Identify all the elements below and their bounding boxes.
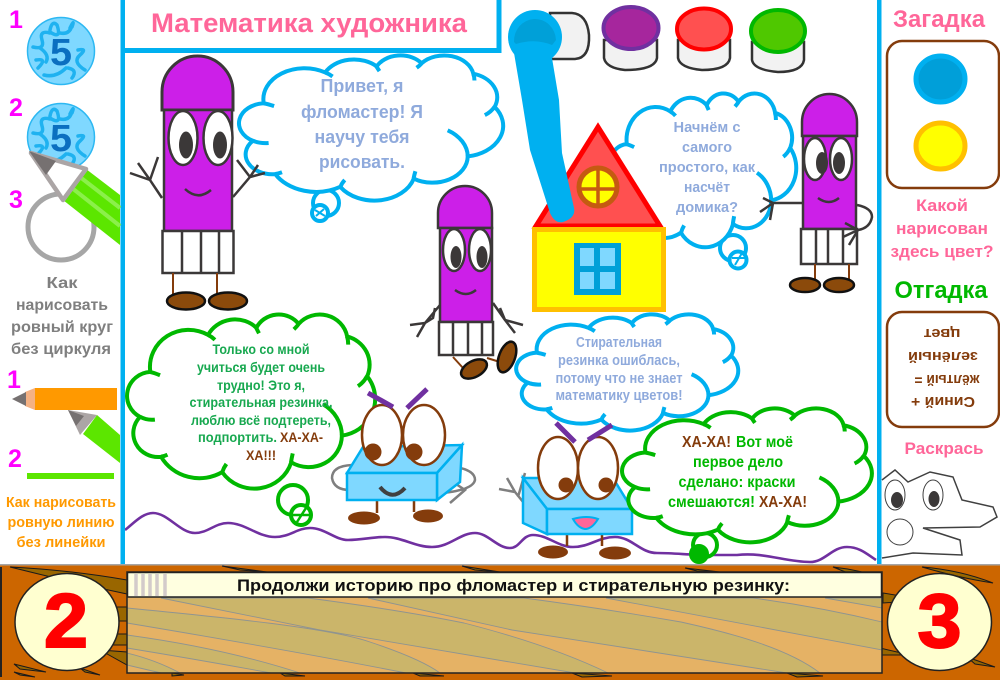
riddle heading: Загадка <box>893 6 986 33</box>
step 2 coin <box>28 104 94 170</box>
cloud text: Стирательная <box>576 335 662 351</box>
colouring outline: crocodile <box>882 470 997 558</box>
can 1 body <box>550 13 589 59</box>
step 2 coin: 5 <box>50 118 72 160</box>
speech cloud: math of colours <box>516 314 738 431</box>
bottom wood panel <box>0 564 1000 680</box>
step number 1: 1 <box>7 366 21 394</box>
speech cloud: marker greeting <box>239 55 503 221</box>
upside-down answer <box>908 325 980 410</box>
riddle question: нарисован <box>896 219 988 238</box>
house <box>534 127 664 310</box>
page number badge 2 <box>15 574 119 670</box>
roof <box>536 127 660 226</box>
cloud text: Начнём с <box>674 119 740 136</box>
caption: circle without compass: нарисовать <box>16 297 108 314</box>
cloud text <box>190 341 332 463</box>
story writing area <box>127 572 882 673</box>
cloud text <box>659 119 755 216</box>
drawn circle <box>28 194 94 260</box>
cloud text <box>668 434 807 511</box>
upside-down answer: цвет <box>924 325 960 342</box>
character: small marker sitting <box>410 186 523 383</box>
cloud text: насчёт <box>684 179 730 196</box>
cloud text: потому что не знает <box>556 371 682 387</box>
colouring heading: Раскрась <box>904 439 984 458</box>
icon: orange pencil <box>12 388 117 410</box>
cloud text: Вот моё <box>736 434 793 451</box>
cloud text: ХА-ХА- <box>280 429 323 445</box>
window <box>574 243 621 295</box>
green paint can <box>751 10 805 72</box>
character: eraser left <box>332 389 475 524</box>
cloud text: стирательная резинка, <box>190 394 332 410</box>
right vertical divider <box>877 0 882 565</box>
riddle box <box>887 41 999 188</box>
upside-down answer: жёлтый = <box>914 371 980 388</box>
blue dot <box>916 56 965 102</box>
blue paint spill <box>508 10 574 222</box>
red paint can <box>677 8 731 70</box>
step number 3: 3 <box>9 186 23 214</box>
cloud text: первое дело <box>693 454 783 471</box>
step 1 coin: 5 <box>50 32 72 74</box>
step number 1: 1 <box>9 6 23 34</box>
cloud text: ХА!!! <box>246 447 276 463</box>
icon: green pencil <box>68 410 120 463</box>
title: Математика художника <box>151 8 468 38</box>
riddle question <box>890 196 994 261</box>
caption: circle without compass: без циркуля <box>11 341 111 358</box>
cloud text: домика? <box>676 199 738 216</box>
cloud text: люблю всё подтереть, <box>191 412 331 428</box>
cloud text: фломастер! Я <box>301 102 423 122</box>
cloud text: Только со мной <box>212 341 310 357</box>
caption: line without ruler: без линейки <box>16 534 106 551</box>
story prompt bar <box>128 572 882 597</box>
cloud text: смешаются! <box>668 494 755 511</box>
cloud text: ХА-ХА! <box>682 434 731 451</box>
right panel: riddle <box>887 6 999 261</box>
page number badge 3: 3 <box>918 579 962 664</box>
cloud text <box>556 335 682 404</box>
drawn green line <box>27 473 114 479</box>
speech cloud: colours mix <box>622 408 872 562</box>
answer box <box>887 312 999 427</box>
paint cans <box>550 7 805 72</box>
upside-down answer: зелёный <box>908 348 978 365</box>
wavy purple line <box>125 513 876 562</box>
cloud text: математику цветов! <box>556 388 682 404</box>
cloud text: сделано: краски <box>678 474 796 491</box>
character: right marker <box>760 94 872 292</box>
cloud text: простого, как <box>659 159 755 176</box>
answer heading: Отгадка <box>894 277 988 304</box>
house wall <box>534 230 664 310</box>
speech cloud: let's draw a house <box>609 93 796 268</box>
caption: circle without compass: Как <box>46 275 79 292</box>
riddle question: Какой <box>916 196 968 215</box>
step number 2: 2 <box>8 445 22 473</box>
left panel: line tutorial <box>7 366 120 479</box>
caption: line without ruler <box>6 494 116 551</box>
caption: line without ruler: ровную линию <box>8 514 115 531</box>
cloud text: трудно! Это я, <box>217 377 305 393</box>
yellow dot <box>916 123 965 169</box>
page number badge 3 <box>888 574 992 670</box>
cloud text: учиться будет очень <box>197 359 325 375</box>
cloud text: ХА-ХА! <box>759 494 807 511</box>
character: big marker <box>130 56 265 310</box>
character: eraser right <box>499 423 665 560</box>
cloud text: резинка ошиблась, <box>558 353 680 369</box>
upside-down answer: Синий + <box>911 393 975 410</box>
purple paint can <box>604 7 658 70</box>
speech cloud: eraser threat <box>127 315 375 525</box>
step 1 coin <box>28 18 94 84</box>
page number badge 2: 2 <box>44 579 88 664</box>
left vertical divider <box>120 0 125 565</box>
cloud text <box>301 76 423 172</box>
riddle question: здесь цвет? <box>890 242 994 261</box>
icon: green pencil on circle <box>29 151 120 245</box>
right panel: answer <box>887 277 999 427</box>
cloud text: самого <box>682 139 732 156</box>
step number 2: 2 <box>9 94 23 122</box>
story prompt bar: Продолжи историю про фломастер и стирательную резинку: <box>237 576 790 595</box>
caption: line without ruler: Как нарисовать <box>6 494 116 511</box>
title box <box>122 0 499 50</box>
caption: circle without compass <box>11 275 113 358</box>
cloud text: подпортить. <box>198 429 277 445</box>
attic window <box>579 168 617 206</box>
cloud text: Привет, я <box>320 76 404 96</box>
cloud text: научу тебя <box>314 127 410 147</box>
cloud text: рисовать. <box>319 152 405 172</box>
left panel: circle tutorial <box>9 6 120 260</box>
caption: circle without compass: ровный круг <box>11 319 113 336</box>
